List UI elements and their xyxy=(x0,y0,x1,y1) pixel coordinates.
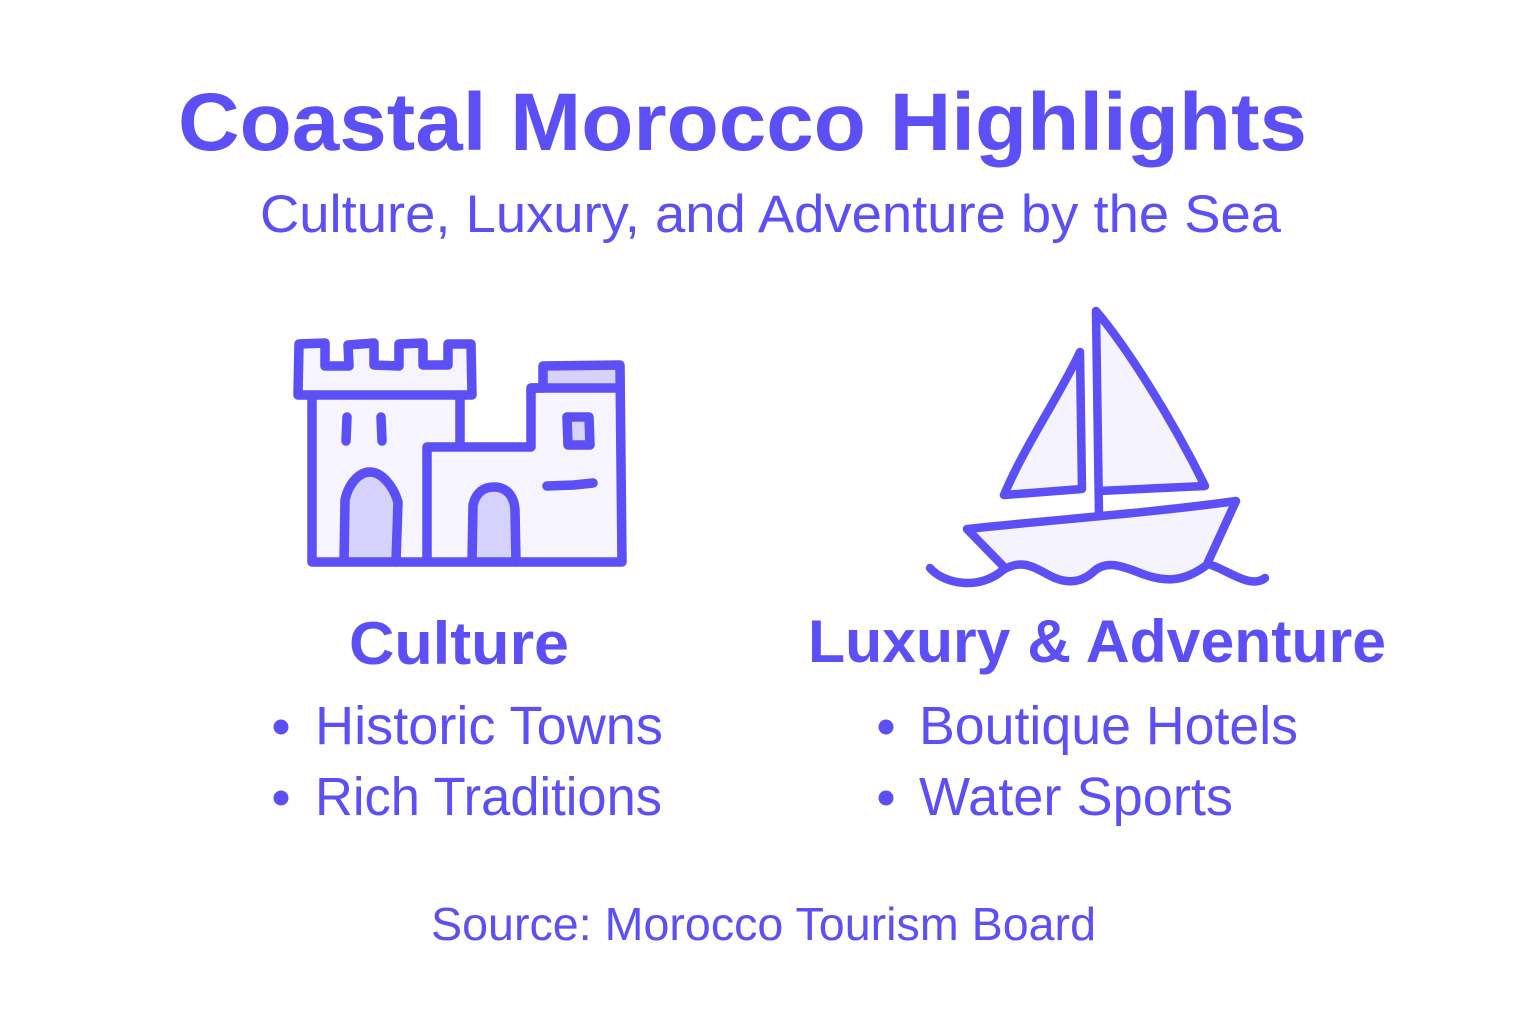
icon: sailboat xyxy=(930,311,1265,583)
source: Source: Morocco Tourism Board xyxy=(431,898,1096,950)
title: Coastal Morocco Highlights xyxy=(178,77,1307,168)
icon: castle xyxy=(298,343,622,562)
list: luxury items xyxy=(878,696,1298,827)
panel: culture xyxy=(274,610,663,827)
list: luxury items: Boutique Hotels xyxy=(919,696,1298,756)
list: luxury items: Water Sports xyxy=(919,767,1233,827)
list: culture items: Historic Towns xyxy=(315,696,663,756)
subtitle: Culture, Luxury, and Adventure by the Sea xyxy=(260,185,1282,244)
list: culture items: Rich Traditions xyxy=(315,767,662,827)
list: culture items xyxy=(274,696,663,827)
heading: culture: Culture xyxy=(349,610,569,677)
heading: luxury and adventure: Luxury & Adventure xyxy=(808,608,1386,675)
panel: luxury and adventure xyxy=(808,608,1386,827)
